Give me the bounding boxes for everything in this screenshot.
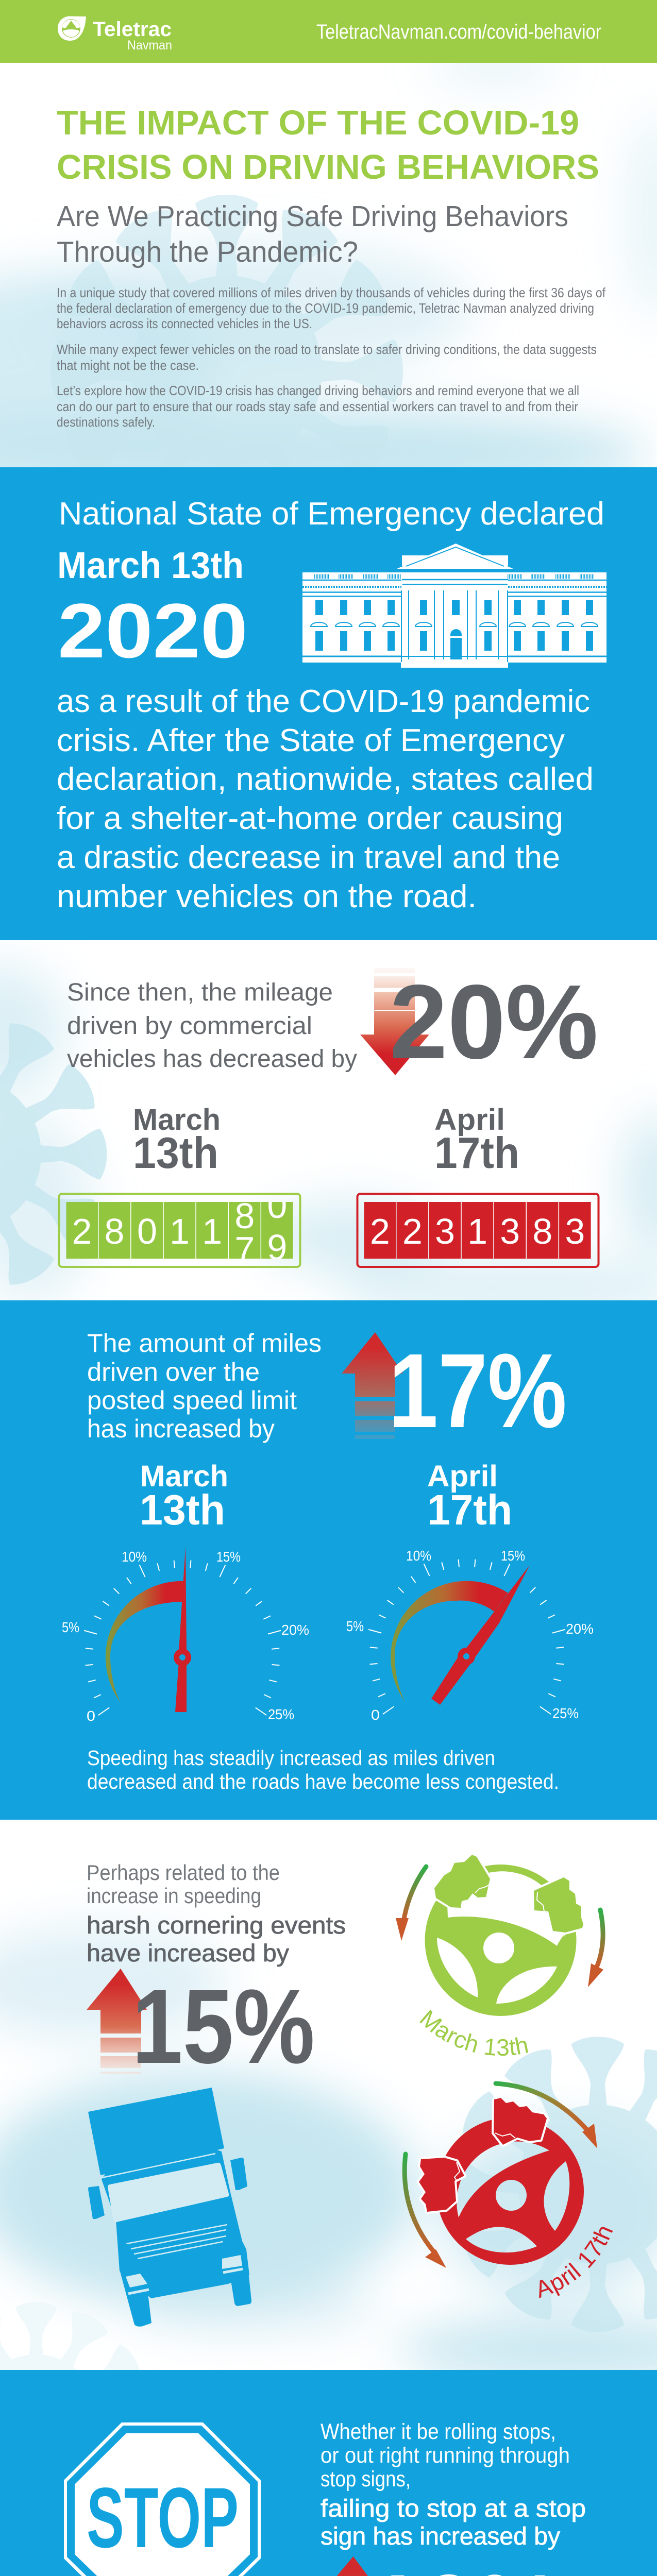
intro text: increase in speeding [87, 1884, 261, 1908]
stop emphasis text: sign has increased by [321, 2523, 560, 2550]
arrow: up red [87, 1969, 147, 2074]
mileage text: Since then, the mileage [67, 979, 333, 1006]
label: march 13th: March [133, 1103, 221, 1137]
label: march 13th: 13th [140, 1486, 225, 1534]
speeding text [87, 1329, 322, 1443]
icon: stop sign [64, 2422, 261, 2576]
background virus: mileage section [0, 1011, 107, 1297]
intro paragraphs: While many expect fewer vehicles on the road to translate to safer driving conditions, the data suggests [57, 342, 597, 357]
odometer: march 13th [59, 1185, 300, 1269]
subtitle: Are We Practicing Safe Driving Behaviors [57, 200, 568, 233]
gauge: march 13th: 20% [281, 1622, 309, 1638]
speeding text: has increased by [87, 1414, 275, 1443]
body text: declaration, nationwide, states called [57, 761, 594, 797]
stat: 15 percent: 15% [132, 1968, 315, 2086]
gauge: april 17th [346, 1548, 594, 1723]
gauge: april 17th: 10% [406, 1548, 431, 1564]
speeding text: driven over the [87, 1358, 260, 1386]
emphasis text [87, 1911, 346, 1967]
mileage text: vehicles has decreased by [67, 1045, 357, 1073]
gauge: april 17th: 5% [346, 1618, 364, 1634]
odometer: march 13th: 7 [234, 1229, 255, 1269]
gauge: april 17th: 0 [371, 1707, 380, 1723]
stat: 17 percent: 17% [389, 1332, 567, 1450]
arrow: up red [342, 1332, 403, 1439]
icon: white house [302, 544, 607, 668]
body text: as a result of the COVID-19 pandemic [57, 684, 590, 719]
icon: Teletrac Navman logo [58, 16, 86, 41]
speeding note: decreased and the roads have become less congested. [87, 1770, 559, 1793]
label: april 17th [434, 1103, 519, 1178]
panel: harsh cornering [87, 1855, 613, 2327]
odometer: march 13th: 2 [72, 1211, 92, 1251]
odometer: march 13th: 0 [267, 1185, 287, 1226]
emphasis text: harsh cornering events [87, 1911, 346, 1939]
panel: stop sign [0, 2370, 657, 2576]
panel: national emergency [0, 467, 657, 940]
intro paragraphs: Let’s explore how the COVID-19 crisis has changed driving behaviors and remind everyone that we all [57, 383, 579, 398]
title: THE IMPACT OF THE COVID-19 [57, 104, 579, 142]
odometer: april 17th [358, 1194, 599, 1267]
intro paragraphs: the federal declaration of emergency due to the COVID-19 pandemic, Teletrac Navman analyzed driving [57, 300, 594, 316]
mileage text [67, 979, 357, 1073]
year: 2020 [58, 587, 248, 674]
odometer: april 17th: 3 [500, 1211, 520, 1251]
odometer: march 13th: 1 [202, 1211, 222, 1251]
panel: speeding [0, 1300, 657, 1820]
title: CRISIS ON DRIVING BEHAVIORS [57, 148, 599, 187]
odometer: april 17th: 3 [565, 1211, 585, 1251]
label: march 13th [133, 1103, 221, 1178]
gauge: april 17th: 15% [501, 1548, 525, 1564]
arrow: up red [319, 2556, 383, 2576]
stop text: stop signs, [321, 2467, 411, 2492]
icon: green steering wheel: March 13th [419, 2010, 528, 2056]
panel: mileage decreased [59, 963, 599, 1269]
gauge: march 13th: 5% [62, 1619, 79, 1635]
intro paragraphs [57, 285, 606, 430]
stop text [321, 2419, 570, 2492]
speeding note: Speeding has steadily increased as miles driven [87, 1746, 495, 1770]
odometer: march 13th: 0 [137, 1211, 157, 1251]
intro text [87, 1860, 280, 1908]
label: march 13th: March [140, 1460, 228, 1493]
intro paragraphs: that might not be the case. [57, 358, 199, 373]
subtitle [57, 200, 568, 268]
label: april 17th: April [434, 1103, 505, 1137]
intro paragraphs: can do our part to ensure that our roads stay safe and essential workers can travel to and from their [57, 399, 578, 414]
label: march 13th: 13th [133, 1129, 218, 1178]
label: april 17th: April [427, 1460, 498, 1493]
label: april 17th: 17th [434, 1129, 519, 1178]
icon: green steering wheel [396, 1855, 605, 2056]
brand name: Teletrac [93, 18, 172, 41]
heading: national state of emergency: National State of Emergency declared [59, 496, 604, 532]
intro paragraphs: destinations safely. [57, 414, 155, 430]
label: april 17th [427, 1460, 512, 1534]
icon: red steering wheel [402, 2081, 613, 2298]
gauge: march 13th: 0 [87, 1708, 95, 1724]
speeding note [87, 1746, 559, 1793]
stop emphasis text [321, 2495, 586, 2550]
background virus: cornering section [450, 2037, 657, 2332]
stop text: or out right running through [321, 2443, 570, 2468]
gauge: april 17th: 25% [552, 1705, 579, 1721]
label: march 13th [140, 1460, 228, 1534]
arrow: down red [360, 968, 429, 1075]
odometer: april 17th: 1 [467, 1211, 487, 1251]
odometer: april 17th: 2 [402, 1211, 423, 1251]
intro text: Perhaps related to the [87, 1860, 280, 1885]
brand sub name: Navman [127, 38, 172, 53]
speeding text: The amount of miles [87, 1329, 322, 1358]
emphasis text: have increased by [87, 1939, 290, 1967]
body text: for a shelter-at-home order causing [57, 801, 563, 836]
odometer: april 17th: 3 [435, 1211, 455, 1251]
title [57, 104, 599, 187]
stat: 20 percent: 20% [390, 963, 598, 1081]
panel: green header [0, 0, 657, 63]
intro paragraphs: behaviors across its connected vehicles in the US. [57, 316, 312, 331]
body text: number vehicles on the road. [57, 879, 477, 914]
gauge: march 13th: 25% [268, 1706, 294, 1722]
icon: stop sign: STOP [87, 2470, 239, 2566]
odometer: april 17th: 2 [370, 1211, 390, 1251]
odometer: march 13th: 1 [170, 1211, 190, 1251]
gauge: march 13th: 10% [122, 1549, 147, 1565]
background virus: lower-left pale [0, 2302, 150, 2531]
gauge: march 13th [62, 1547, 309, 1724]
stop text: Whether it be rolling stops, [321, 2419, 556, 2444]
gauge: march 13th: 15% [216, 1549, 241, 1565]
body text [57, 684, 594, 914]
odometer: march 13th: 8 [105, 1211, 124, 1251]
odometer: march 13th: 9 [267, 1227, 287, 1267]
label: april 17th: 17th [427, 1486, 512, 1534]
icon: red steering wheel: April 17th [539, 2227, 613, 2298]
url: TeletracNavman.com/covid-behavior [316, 21, 601, 43]
mileage text: driven by commercial [67, 1012, 312, 1040]
background virus: intro [50, 195, 403, 547]
odometer: april 17th: 8 [532, 1211, 552, 1251]
speeding text: posted speed limit [87, 1386, 297, 1415]
date: March 13th [57, 545, 244, 586]
body text: a drastic decrease in travel and the [57, 840, 560, 875]
gauge: april 17th: 20% [566, 1621, 594, 1637]
icon: truck leaning [88, 2088, 251, 2327]
stop emphasis text: failing to stop at a stop [321, 2495, 586, 2522]
subtitle: Through the Pandemic? [57, 235, 358, 268]
odometer: march 13th: 8 [234, 1196, 255, 1236]
body text: crisis. After the State of Emergency [57, 723, 565, 758]
